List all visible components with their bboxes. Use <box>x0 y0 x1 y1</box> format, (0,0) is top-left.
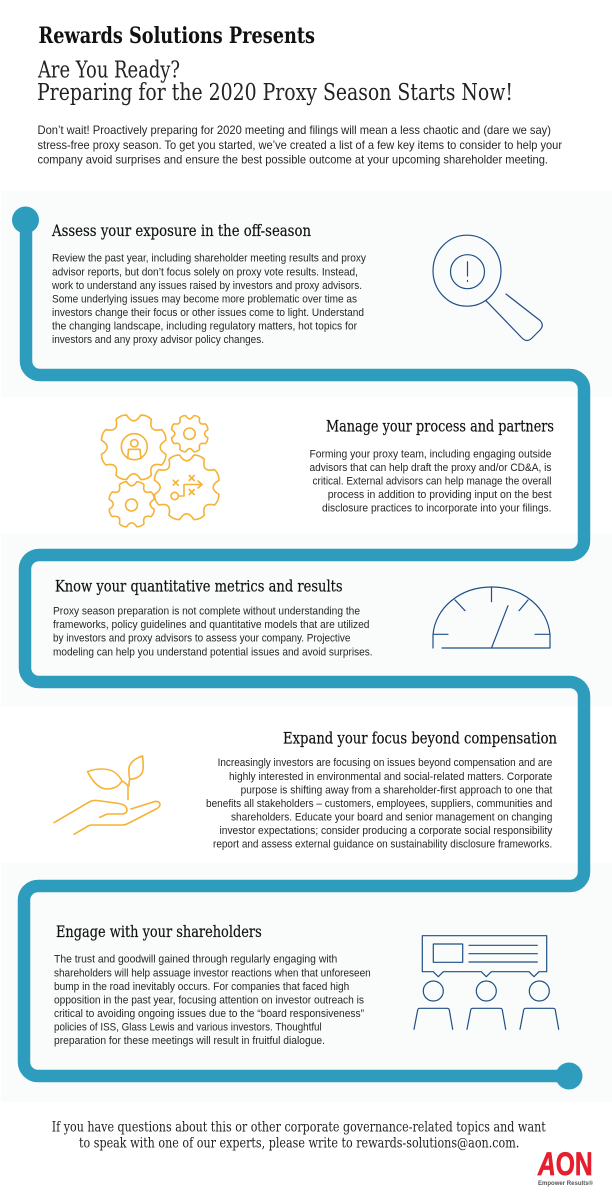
subtitle <box>37 56 513 106</box>
body text: expand: Increasingly investors are focusing on issues beyond compensation and are <box>218 757 552 769</box>
panel: beyond compensation <box>54 729 557 850</box>
icon: gears <box>90 403 231 535</box>
subtitle: Are You Ready? <box>37 56 180 84</box>
body text: expand: highly interested in environmental and social-related matters. Corporate <box>229 771 552 783</box>
body text: manage <box>310 448 552 515</box>
intro text: stress-free proxy season. To get you started, we’ve created a list of a few key items to consider to help your <box>38 138 562 152</box>
heading: manage: Manage your process and partners <box>326 418 554 436</box>
panel: engage shareholders <box>54 923 559 1047</box>
icon: hand with seedling <box>54 756 160 834</box>
panel: assess exposure <box>51 222 542 346</box>
body text: expand: benefits all stakeholders – customers, employees, suppliers, communities and <box>206 798 552 810</box>
footer call to action <box>52 1120 546 1151</box>
intro text: company avoid surprises and ensure the best possible outcome at your upcoming shareholder meeting. <box>38 152 548 166</box>
body text: assess: investors change their focus or other issues come to light. Understand <box>52 307 364 319</box>
body text: expand: shareholders. Educate your board and senior management on changing <box>231 812 552 824</box>
body text: manage: disclosure practices to incorporate into your filings. <box>322 503 552 515</box>
body text: metrics: by investors and proxy advisors to assess your company. Projective <box>53 633 350 645</box>
body text: expand: investor expectations; consider producing a corporate social responsibility <box>220 825 553 837</box>
body text: metrics <box>53 605 373 658</box>
body text: engage: opposition in the past year, focusing attention on investor outreach is <box>54 994 364 1006</box>
body text: manage: process in addition to providing input on the best <box>328 489 552 501</box>
body text: metrics: modeling can help you understand potential issues and avoid surprises. <box>53 646 373 658</box>
body text: assess: advisor reports, but don’t focus solely on proxy vote results. Instead, <box>52 266 358 278</box>
body text: engage: critical to avoiding ongoing issues due to the “board responsiveness” <box>54 1008 364 1020</box>
body text: engage: bump in the road inevitably occurs. For companies that faced high <box>54 981 349 993</box>
body text: metrics: frameworks, policy guidelines and quantitative models that are utilized <box>53 619 370 631</box>
body text: manage: Forming your proxy team, including engaging outside <box>310 448 552 460</box>
body text: engage: shareholders will help assuage investor reactions when that unforeseen <box>54 967 371 979</box>
panel: manage process <box>90 403 554 535</box>
heading: engage: Engage with your shareholders <box>56 923 262 941</box>
body text: assess: investors and any proxy advisor policy changes. <box>52 334 264 346</box>
icon: gauge <box>433 587 550 648</box>
body text: expand: purpose is shifting away from a shareholder-first approach to one that <box>241 785 553 797</box>
logo: Aon: Empower Results® <box>538 1179 593 1187</box>
icon: audience with speech bubble <box>414 936 559 1029</box>
body text: metrics: Proxy season preparation is not complete without understanding the <box>53 605 360 617</box>
body text: assess: work to understand any issues raised by investors and proxy advisors. <box>51 280 362 292</box>
body text: engage: preparation for these meetings will result in fruitful dialogue. <box>54 1035 325 1047</box>
body text: assess: the changing landscape, including regulatory matters, hot topics for <box>52 321 357 333</box>
body text: manage: critical. External advisors can help manage the overall <box>312 475 552 487</box>
logo: Aon: AON <box>537 1146 593 1182</box>
body text: engage <box>54 954 371 1047</box>
body text: manage: advisors that can help draft the proxy and/or CD&A, is <box>310 462 552 474</box>
body text: expand: report and assess external guidance on sustainability disclosure frameworks. <box>213 838 552 850</box>
body text: engage: The trust and goodwill gained through regularly engaging with <box>54 954 337 966</box>
body text: assess: Some underlying issues may become more problematic over time as <box>52 293 357 305</box>
body text: assess <box>51 253 366 346</box>
winding path connector <box>12 206 584 1090</box>
heading: metrics: Know your quantitative metrics and results <box>55 577 343 595</box>
body text: expand <box>206 757 553 850</box>
body text: engage: policies of ISS, Glass Lewis and various investors. Thoughtful <box>54 1022 322 1034</box>
icon: magnifying glass <box>433 235 542 340</box>
body text: assess: Review the past year, including shareholder meeting results and proxy <box>52 253 366 265</box>
heading: assess: Assess your exposure in the off-season <box>51 222 311 240</box>
intro text: Don’t wait! Proactively preparing for 2020 meeting and filings will mean a less chaotic and (dare we say) <box>38 123 551 137</box>
panel: quantitative metrics <box>53 577 550 658</box>
header title: Rewards Solutions Presents <box>38 23 315 49</box>
heading: expand: Expand your focus beyond compensation <box>283 729 557 747</box>
intro text <box>38 123 562 166</box>
